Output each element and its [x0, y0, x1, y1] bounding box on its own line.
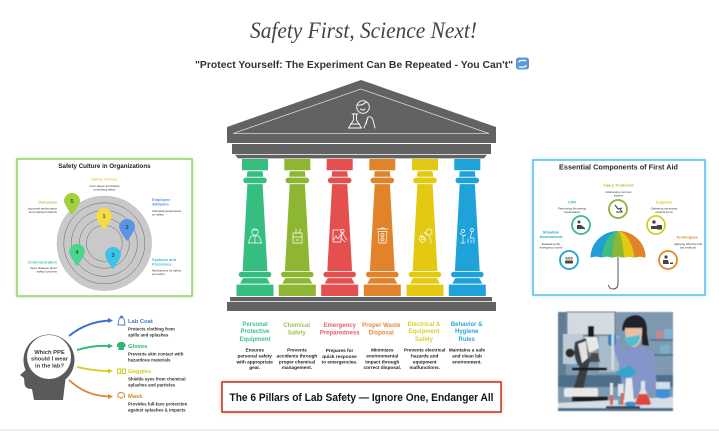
pillar: chemical safety — [279, 159, 316, 296]
item: goggles: splashes and particles — [128, 382, 176, 387]
label: systems and processes: promotion — [152, 272, 165, 276]
callout banner: The 6 Pillars of Lab Safety — Ignore One, Endanger All — [230, 392, 494, 404]
pillar caption: emergency preparedness: quick response — [322, 354, 357, 359]
arrow: gloves — [77, 344, 113, 350]
pin 4 — [69, 244, 85, 266]
label: employee attitudes — [152, 197, 182, 216]
label: safety culture: Core values and beliefs — [89, 184, 120, 188]
pillar caption: personal protective equipment: Ensures — [245, 347, 264, 352]
node: situation assessment — [540, 230, 578, 269]
node: cpr: Performing life-saving — [558, 206, 586, 210]
pin 3 — [105, 247, 121, 269]
pillar caption: behavior and hygiene rules: environment. — [452, 359, 482, 364]
pillar caption: electrical and equipment safety: Equipment — [408, 329, 440, 335]
label: employee attitudes: on safety — [152, 212, 164, 216]
label: communication: Communication — [28, 260, 58, 264]
pillar caption: chemical safety: management. — [282, 365, 312, 370]
pillar caption: behavior and hygiene rules — [449, 322, 485, 364]
illustration: scientist at microscope — [558, 312, 673, 411]
pillar caption: personal protective equipment: gear. — [249, 365, 260, 370]
panel: essential components of first aid — [533, 160, 705, 295]
icon: emergency plan — [333, 229, 347, 242]
item: lab coat: Protects clothing from — [128, 327, 175, 332]
label: communication: Open dialogue about — [30, 266, 57, 270]
pillar caption: chemical safety: Safety — [288, 331, 306, 337]
node: injury treatment: Injury Treatment — [603, 182, 634, 188]
pillar caption: electrical and equipment safety: Prevents electrical — [404, 347, 445, 352]
icon: scientist in pediment — [348, 101, 375, 128]
node: cpr — [558, 200, 590, 234]
diagram: which ppe — [20, 316, 188, 412]
node: techniques: Techniques — [676, 234, 698, 240]
pillar caption: electrical and equipment safety — [404, 322, 445, 370]
pin 2 — [119, 219, 135, 241]
icon: head silhouette — [20, 334, 74, 400]
label: systems and processes: Mechanisms for safety — [152, 268, 181, 272]
subtitle: "Protect Yourself: The Experiment Can Be Repeated - You Can't" — [195, 60, 513, 71]
node: situation assessment: Assessment — [540, 234, 563, 239]
item: lab coat: spills and splashes — [128, 332, 169, 337]
pillar caption: personal protective equipment: Equipment — [240, 337, 271, 343]
pillar caption: emergency preparedness — [320, 323, 360, 365]
arrow: goggles — [77, 367, 113, 374]
pillar caption: proper waste disposal: Proper Waste — [362, 323, 401, 329]
label: employee attitudes: Employee — [152, 197, 171, 202]
label: outcomes: and reduced incidents — [29, 210, 58, 214]
pillar caption: proper waste disposal: Minimizes — [371, 347, 394, 352]
pillar caption: personal protective equipment — [235, 322, 273, 370]
pin 1: 1 — [102, 214, 106, 220]
item: mask: Mask — [128, 394, 143, 400]
pillar caption: behavior and hygiene rules: and clean lab — [452, 353, 482, 358]
item: goggles: Shields eyes from chemical — [128, 377, 186, 382]
node: injury treatment — [603, 182, 634, 218]
temple base — [227, 297, 496, 311]
node: situation assessment: SOS — [565, 256, 573, 260]
node: situation assessment: Situation — [543, 230, 560, 234]
pillar caption: behavior and hygiene rules: Rules — [459, 337, 476, 343]
pillar caption: chemical safety — [277, 323, 317, 370]
label: systems and processes: Processes — [152, 262, 171, 266]
temple roof — [227, 80, 496, 158]
icon: head silhouette: in the lab? — [35, 363, 64, 369]
node: supplies: Supplies — [656, 200, 672, 204]
pin 1 — [96, 208, 112, 230]
pillar caption: chemical safety: accidents through — [277, 353, 317, 358]
item: gloves: Prevents skin contact with — [128, 352, 184, 357]
pillar: personal protective equipment — [236, 159, 274, 296]
label: employee attitudes: Individual perspectives — [152, 209, 182, 213]
node: supplies: Gathering necessary — [651, 206, 678, 210]
item: gloves: Gloves — [128, 344, 147, 350]
concentric circles chart — [57, 196, 152, 291]
label: safety culture: Safety Culture — [91, 177, 119, 182]
scientist — [608, 315, 657, 395]
label: communication: safety concerns — [37, 270, 58, 274]
item: goggles — [118, 369, 186, 387]
node: supplies: medical items — [655, 210, 673, 214]
pillar caption: chemical safety: proper chemical — [279, 359, 315, 364]
arrow: lab coat — [69, 318, 113, 336]
item: lab coat: Lab Coat — [128, 319, 153, 325]
node: injury treatment: Addressing common — [605, 190, 632, 194]
pillar caption: emergency preparedness: to emergencies. — [322, 360, 357, 365]
icon: head silhouette: Which PPE — [34, 350, 65, 356]
pillar: emergency preparedness — [321, 159, 358, 296]
item: mask: against splashes & impacts — [128, 407, 186, 412]
node: techniques: aid methods — [680, 246, 696, 250]
pillar caption: personal protective equipment: Protective — [240, 329, 270, 335]
panel heading: Safety Culture in Organizations — [58, 163, 151, 170]
icon: chemical jar — [293, 229, 302, 243]
pillar caption: personal protective equipment: Personal — [242, 322, 268, 328]
node: techniques — [659, 234, 702, 269]
label: employee attitudes: Attitudes — [152, 202, 169, 206]
pillar: electrical and equipment safety — [406, 159, 444, 296]
pillar caption: proper waste disposal: impact through — [365, 359, 399, 364]
pin 5: 5 — [70, 199, 74, 205]
item: mask — [118, 392, 188, 412]
arrow: mask — [69, 380, 113, 399]
node: supplies — [647, 200, 678, 234]
icon: people washing — [460, 228, 474, 243]
pillar caption: electrical and equipment safety: malfunctions. — [409, 365, 440, 370]
pillar caption: behavior and hygiene rules: Behavior & — [451, 322, 483, 328]
node: situation assessment: emergency scene — [540, 246, 563, 250]
pillar caption: chemical safety: Chemical — [283, 323, 310, 329]
icon: repeat button — [516, 58, 529, 70]
item: mask: Provides full-face protection — [128, 402, 188, 407]
label: systems and processes — [152, 257, 181, 276]
pillar: behavior and hygiene rules — [449, 159, 486, 296]
label: communication — [28, 260, 58, 274]
node: situation assessment: Evaluating the — [542, 242, 561, 246]
icon: electrical safety — [419, 229, 432, 243]
item: gloves: hazardous materials — [128, 357, 171, 362]
pillar caption: personal protective equipment: with appropriate — [235, 359, 273, 364]
title: Safety First, Science Next! — [250, 18, 477, 43]
pillar caption: proper waste disposal: Disposal — [369, 331, 394, 337]
pillar caption: behavior and hygiene rules: Maintains a safe — [449, 347, 485, 352]
pin 4: 4 — [75, 250, 79, 256]
node: injury treatment: injuries — [614, 194, 624, 198]
label: outcomes — [28, 200, 58, 214]
pin 3: 3 — [111, 253, 115, 259]
node: cpr: resuscitation — [564, 210, 581, 214]
pillar caption: electrical and equipment safety: hazards and — [411, 353, 439, 358]
pillar caption: emergency preparedness: Preparedness — [320, 331, 360, 337]
label: safety culture — [89, 177, 120, 192]
node: cpr: CPR — [568, 200, 576, 204]
pillar caption: emergency preparedness: Emergency — [324, 323, 357, 329]
label: outcomes: Outcomes — [38, 200, 57, 204]
pillar caption: personal protective equipment: personal safety — [238, 353, 272, 358]
microscope — [564, 326, 608, 402]
pillar: proper waste disposal — [364, 159, 401, 296]
label: outcomes: Improved performance — [28, 206, 57, 210]
pillar caption: behavior and hygiene rules: Hygiene — [455, 329, 479, 335]
pin 2: 2 — [125, 225, 129, 231]
pillar caption: proper waste disposal: environmental — [366, 353, 398, 358]
item: goggles: Goggles — [128, 369, 151, 375]
pillar caption: emergency preparedness: Prepares for — [326, 348, 353, 353]
pillar caption: proper waste disposal — [362, 323, 401, 370]
umbrella — [590, 231, 646, 290]
panel heading: Essential Components of First Aid — [559, 162, 678, 172]
glassware — [606, 378, 670, 408]
node: techniques: Applying effective first — [674, 242, 702, 246]
pillar caption: electrical and equipment safety: Electrical & — [408, 322, 441, 328]
icon: protective gear — [248, 229, 262, 243]
pillar caption: proper waste disposal: correct disposal. — [364, 365, 401, 370]
pillar caption: electrical and equipment safety: Safety — [415, 337, 434, 343]
pillar caption: electrical and equipment safety: equipment — [413, 359, 437, 364]
panel: safety culture in organizations — [17, 159, 192, 296]
pillar caption: chemical safety: Prevents — [287, 347, 307, 352]
label: systems and processes: Systems and — [152, 257, 177, 262]
icon: waste bin — [377, 228, 388, 243]
item: gloves — [117, 342, 184, 362]
item: lab coat — [118, 316, 175, 337]
label: safety culture: prioritizing safety — [94, 188, 116, 192]
pin 5 — [64, 193, 80, 215]
icon: head silhouette: should I wear — [31, 357, 69, 363]
callout banner — [222, 382, 501, 412]
